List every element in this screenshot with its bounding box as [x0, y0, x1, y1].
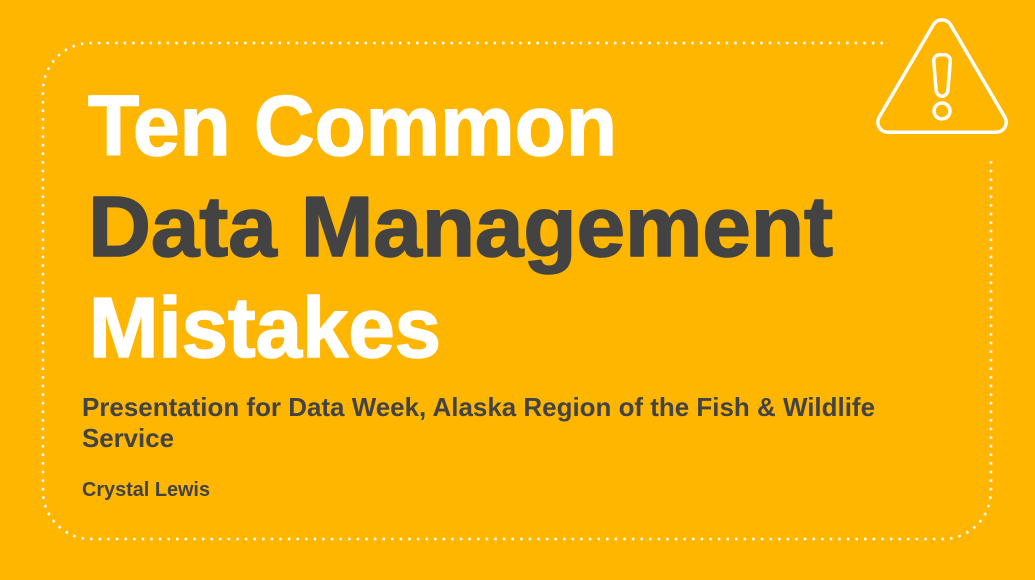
subtitle: [82, 392, 875, 453]
subtitle: Presentation for Data Week, Alaska Region of the Fish & Wildlife: [82, 392, 875, 422]
title line: Ten Common: Ten Common: [88, 79, 617, 174]
title: [88, 79, 833, 376]
dotted frame: [43, 43, 991, 539]
title line: Data Management: Data Management: [88, 180, 833, 275]
author: Crystal Lewis: [82, 479, 210, 501]
subtitle: Service: [82, 423, 174, 453]
icon: warning triangle: [878, 20, 1006, 132]
title line: Mistakes: Mistakes: [89, 281, 441, 376]
